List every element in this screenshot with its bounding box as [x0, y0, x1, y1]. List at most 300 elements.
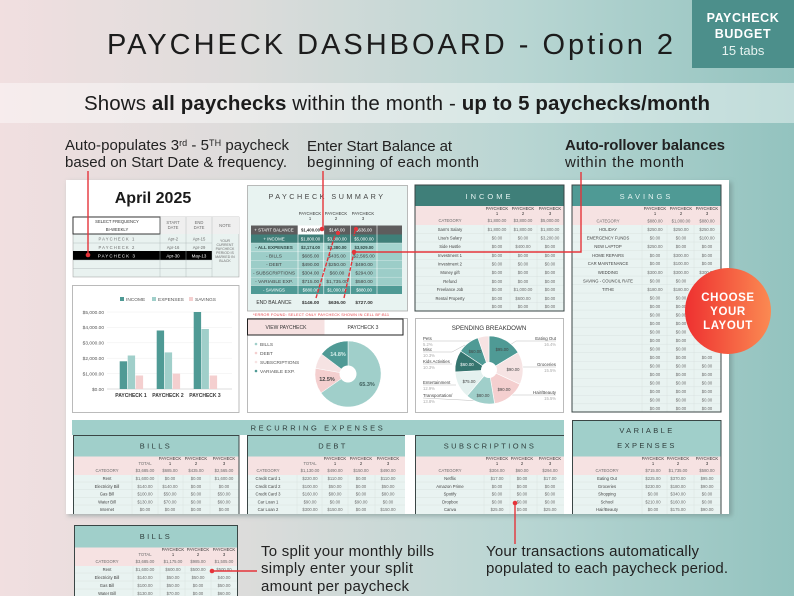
table: debt: PAYCHECK [350, 456, 372, 461]
annotation: auto-populates: TH [209, 138, 221, 148]
table: subscriptions: $0.00 [545, 484, 556, 489]
table: income [415, 185, 564, 311]
panel: paycheck summary: $880.00 [303, 288, 319, 292]
panel: spending breakdown: 15.5% [544, 368, 556, 373]
callout table: bills split: $500.00 [216, 567, 232, 572]
annotation: auto-populates: paycheck [221, 137, 290, 154]
panel: paycheck selector table: START [166, 220, 180, 225]
pie chart: 65.3% [359, 382, 375, 388]
table: savings: $250.00 [673, 227, 689, 232]
table: subscriptions: Netflix [444, 476, 457, 481]
table: variable expenses: $90.00 [701, 484, 714, 489]
table: income: Rental Property [435, 296, 465, 301]
panel: paycheck summary: - SUBSCRIPTIONS [253, 271, 295, 277]
panel: paycheck selector table: Apr-30 [166, 254, 180, 258]
panel: paycheck summary: 1 [309, 216, 312, 221]
table: savings: $0.00 [650, 253, 661, 258]
table: savings: $0.00 [676, 398, 687, 402]
table: debt: $110.00 [328, 476, 343, 481]
table: bills: PAYCHECK [159, 456, 181, 461]
callout table: bills split: $1,505.00 [215, 559, 234, 564]
arrow: start balance pointer [320, 171, 324, 231]
table: income: $1,800.00 [541, 227, 560, 232]
table: subscriptions: Amazon Prime [436, 484, 464, 489]
table: debt: $80.00 [382, 492, 395, 496]
table: bills: CATEGORY [95, 468, 119, 473]
table: savings: $100.00 [699, 236, 715, 240]
callout table: bills split: $60.00 [218, 591, 231, 596]
table: variable expenses: 1 [652, 461, 655, 466]
panel: paycheck selector table: Apr-2 [168, 236, 179, 242]
panel: spending breakdown: 5.2% [423, 342, 433, 347]
table: debt: $0.00 [330, 500, 341, 504]
callout table: bills split: PAYCHECK [213, 547, 235, 552]
table: income: $0.00 [492, 296, 503, 301]
panel: paycheck selector table: Apr-15 [193, 236, 206, 242]
annotation: auto-rollover balances: within the month [564, 154, 684, 171]
panel: spending breakdown: $95.00 [496, 347, 509, 352]
panel: paycheck selector table: Apr-29 [193, 245, 206, 250]
table: savings: $0.00 [650, 364, 661, 368]
table: savings: $0.00 [676, 244, 687, 249]
table: income: 2 [522, 211, 525, 216]
panel: paycheck selector table: DATE [168, 225, 179, 230]
panel: bar chart: $1,000.00 [83, 372, 104, 378]
panel: paycheck summary: END BALANCE [256, 300, 292, 306]
table: savings: $0.00 [650, 355, 661, 360]
table: savings: PAYCHECK [670, 206, 692, 211]
callout table: bills split: $100.00 [137, 583, 153, 588]
table: savings: $300.00 [647, 270, 663, 275]
table: income: CATEGORY [438, 218, 462, 223]
table: savings: $0.00 [676, 312, 687, 318]
table: income: INCOME [466, 192, 514, 201]
annotation: auto-rollover balances: Auto-rollover balances [565, 137, 725, 154]
panel: spending breakdown: Pets [423, 336, 433, 341]
table: savings: $0.00 [650, 296, 661, 300]
panel: paycheck summary: - SAVINGS [263, 288, 285, 292]
annotation: split monthly bills: simply enter your split [261, 560, 414, 577]
table: savings: $1,000.00 [672, 218, 691, 224]
table: subscriptions: $0.00 [517, 507, 528, 512]
table: income: $0.00 [492, 287, 503, 292]
panel: bar chart: PAYCHECK 1 [115, 393, 147, 399]
table: debt: 3 [387, 461, 390, 466]
annotation: auto-rollover balances [564, 137, 725, 171]
table: income: 1 [496, 211, 499, 216]
callout table: bills split: $40.00 [218, 575, 231, 580]
table: savings: CAR MAINTENANCE [588, 261, 628, 266]
badge: paycheck budget 15 tabs: 15 tabs [722, 43, 765, 58]
panel: paycheck summary: - DEBT [266, 262, 282, 268]
table: income: Sam's Salary [438, 227, 463, 232]
panel: paycheck summary [248, 186, 408, 311]
table: bills: $0.00 [219, 484, 230, 489]
table: bills: $3,685.00 [136, 468, 155, 473]
table: bills: $1,600.00 [136, 476, 155, 481]
table: income: $0.00 [545, 244, 556, 249]
panel: spending breakdown: 10.3% [423, 365, 435, 370]
table: income: $0.00 [492, 279, 503, 284]
table: bills: BILLS [140, 442, 172, 450]
table: debt: $0.00 [383, 500, 394, 504]
table: variable expenses: PAYCHECK [642, 456, 664, 461]
bars: paycheck 3 [194, 312, 217, 389]
table: income: $0.00 [545, 287, 556, 292]
panel: paycheck summary: - VARIABLE EXP. [255, 279, 293, 285]
table: subscriptions: $17.00 [544, 476, 557, 481]
annotation: auto-populates: Auto-populates 3 [65, 137, 179, 154]
panel: spending breakdown: Eating Out [535, 336, 557, 341]
table: debt: $110.00 [381, 476, 396, 481]
table: subscriptions: $0.00 [492, 484, 503, 489]
table: savings: $250.00 [647, 227, 663, 232]
table: bills [73, 435, 239, 514]
panel: bar chart: $3,000.00 [83, 340, 104, 346]
panel: paycheck summary: $2,174.00 [301, 245, 321, 250]
panel: spending breakdown: Misc [423, 347, 433, 352]
panel: paycheck summary: $1,400.00 [301, 228, 321, 233]
table: variable expenses: $230.00 [645, 484, 661, 489]
table: debt: PAYCHECK [324, 456, 346, 461]
table: variable expenses: Groceries [598, 484, 616, 489]
table: subscriptions: PAYCHECK [539, 456, 561, 461]
panel: paycheck summary: $304.00 [302, 271, 319, 277]
callout table: bills split: $50.00 [192, 575, 205, 580]
panel: spending breakdown: 10.3% [423, 353, 435, 358]
panel: bar chart: $0.00 [92, 387, 104, 393]
table: income: $0.00 [518, 270, 529, 275]
table: subscriptions: $25.00 [491, 507, 504, 512]
table: income: $1,800.00 [514, 227, 533, 232]
table: income: Side Hustle [439, 244, 461, 249]
table: bills: PAYCHECK [213, 456, 235, 461]
badge: paycheck budget 15 tabs: PAYCHECK [707, 11, 779, 25]
table: subscriptions: 3 [549, 461, 552, 466]
table: savings: HOLIDAY [599, 227, 617, 232]
table: income: $0.00 [492, 270, 503, 275]
table: savings: $0.00 [676, 406, 687, 411]
table: income: Investment 2 [438, 262, 463, 266]
table: income: $0.00 [492, 262, 503, 266]
table: debt: $0.00 [356, 492, 367, 496]
panel: spending breakdown: 12.9% [423, 386, 435, 391]
table: bills: $2,565.00 [215, 468, 234, 473]
table: savings: $0.00 [650, 338, 661, 343]
panel: paycheck summary: $250.00 [328, 262, 346, 268]
table: bills: $0.00 [165, 476, 176, 481]
panel: paycheck selector table: DATE [194, 225, 205, 230]
table: savings: $0.00 [650, 372, 661, 377]
table: subscriptions: Canva [444, 507, 457, 512]
error note: *ERROR FOUND: SELECT ONLY PAYCHECK SHOWN IN CELL BF:B11 [253, 312, 389, 317]
table: savings: $880.00 [699, 218, 715, 224]
table: variable expenses: $715.00 [645, 468, 661, 473]
legend [120, 297, 216, 303]
table: savings: $0.00 [650, 312, 661, 318]
table: variable expenses: $0.00 [648, 492, 659, 496]
table: subscriptions: SUBSCRIPTIONS [444, 442, 536, 450]
donut chart [455, 336, 523, 404]
table: savings: $0.00 [702, 389, 713, 394]
table: debt: TOTAL [303, 461, 317, 466]
table: variable expenses: $95.00 [701, 476, 714, 481]
panel: paycheck selector table: May-13 [192, 254, 207, 258]
bars: paycheck 1 [120, 356, 143, 389]
table: savings: WEDDING [598, 270, 618, 275]
table: savings: $0.00 [702, 364, 713, 368]
table: debt: $220.00 [302, 476, 318, 481]
table: savings: $0.00 [702, 253, 713, 258]
panel: paycheck selector table: YOUR [220, 239, 231, 243]
table: subscriptions: PAYCHECK [511, 456, 533, 461]
table: debt: Car Loan 1 [258, 500, 279, 504]
annotation: transactions populated: Your transactions automatically [486, 543, 700, 560]
table: savings: $0.00 [650, 406, 661, 411]
panel: paycheck summary: $2,380.00 [327, 245, 347, 250]
panel: paycheck summary: PAYCHECK [352, 211, 374, 216]
recurring expenses band: RECURRING EXPENSES [251, 424, 385, 432]
panel: spending breakdown [416, 318, 564, 412]
callout table: bills split: TOTAL [138, 552, 152, 557]
table: variable expenses: $0.00 [648, 507, 659, 512]
table: debt: $300.00 [302, 507, 318, 512]
callout table: bills split: $1,175.00 [164, 559, 183, 564]
badge: choose your layout: YOUR [710, 306, 746, 318]
pie legend: VARIABLE EXP. [260, 369, 295, 375]
table: income: $1,800.00 [488, 218, 507, 223]
annotation: enter start balance: Enter Start Balance at [307, 138, 453, 155]
table: variable expenses: Eating Out [597, 476, 618, 481]
table: savings: $0.00 [676, 346, 687, 352]
table: variable expenses: $370.00 [670, 476, 686, 481]
callout table: bills split: $0.00 [193, 591, 204, 596]
table: variable expenses: VARIABLE [619, 426, 675, 435]
table: income: $0.00 [545, 262, 556, 266]
callout table: bills split: PAYCHECK [162, 547, 184, 552]
badge: choose your layout [685, 268, 771, 354]
table: savings: $0.00 [676, 236, 687, 240]
annotation: transactions populated: populated to each paycheck period. [486, 560, 728, 577]
panel: paycheck selector table: BLACK [219, 259, 231, 263]
table: bills: $0.00 [191, 476, 202, 481]
table: debt: $80.00 [329, 492, 342, 496]
arrow: auto-rollover pointer [352, 172, 581, 254]
table: bills: Rent [103, 476, 112, 481]
panel: paycheck selector table: SELECT FREQUENCY [95, 219, 139, 224]
table: income: $1,800.00 [488, 227, 507, 232]
table: savings: $880.00 [647, 218, 663, 224]
table: debt: $100.00 [302, 484, 318, 489]
table: bills: $60.00 [218, 500, 231, 504]
table: debt: $50.00 [382, 484, 395, 489]
table: bills: $0.00 [165, 507, 176, 512]
table: subscriptions: 2 [521, 461, 524, 466]
arrow: transactions pointer [513, 501, 517, 544]
table: debt: Credit Card 3 [256, 492, 281, 496]
table: savings: SAVING - COUNCIL RATE [583, 278, 633, 284]
table: bills: $50.00 [218, 492, 231, 496]
callout table: bills split: $50.00 [167, 575, 180, 580]
panel: bar chart: $5,000.00 [83, 310, 104, 316]
table: bills: $0.00 [140, 507, 151, 512]
table: variable expenses: $180.00 [670, 484, 686, 489]
panel: paycheck selector table: END [195, 220, 203, 225]
table: income: $0.00 [518, 236, 529, 240]
table: subscriptions: $25.00 [544, 507, 557, 512]
table: savings: $0.00 [702, 244, 713, 249]
table: variable expenses: $210.00 [645, 500, 661, 504]
panel: paycheck summary: $435.00 [328, 254, 346, 260]
panel: paycheck summary: 2 [335, 216, 338, 221]
table: subscriptions [415, 435, 564, 514]
table: bills: $0.00 [191, 500, 202, 504]
leader lines [423, 338, 556, 401]
badge: choose your layout: LAYOUT [703, 320, 753, 332]
table: savings: $300.00 [673, 253, 689, 258]
panel: paycheck selector table: Apr-16 [167, 245, 180, 250]
table: bills: $1,600.00 [215, 476, 234, 481]
pie legend: DEBT [260, 351, 273, 357]
table: subscriptions: $0.00 [492, 500, 503, 504]
panel: paycheck summary: PAYCHECK [299, 211, 321, 216]
panel: paycheck summary: $580.00 [355, 279, 373, 285]
panel: paycheck summary: $490.00 [355, 262, 373, 268]
panel: bar chart: PAYCHECK 2 [152, 393, 184, 399]
table: variable expenses: $340.00 [670, 492, 686, 496]
table: income: 3 [549, 211, 552, 216]
panel: paycheck summary: + START BALANCE [254, 228, 294, 233]
table: variable expenses [572, 420, 721, 514]
panel: paycheck summary: $1,735.00 [326, 279, 348, 285]
table: debt: $1,130.00 [301, 468, 320, 473]
table: savings: NEW LAPTOP [594, 244, 622, 249]
table: savings: $0.00 [650, 236, 661, 240]
table: debt [247, 435, 405, 514]
table: income: PAYCHECK [486, 206, 508, 211]
pie chart: 12.5% [319, 377, 335, 383]
table: savings: $0.00 [676, 364, 687, 368]
table: savings: $0.00 [676, 296, 687, 300]
table: savings: $0.00 [676, 389, 687, 394]
panel: paycheck summary: $490.00 [302, 262, 319, 268]
table: income: PAYCHECK [539, 206, 561, 211]
table: subscriptions: $0.00 [545, 500, 556, 504]
table: income: $0.00 [545, 304, 556, 309]
annotation: auto-populates: based on Start Date & frequency. [65, 154, 287, 171]
table: income: Lisa's Salary [438, 236, 463, 240]
table: variable expenses: Shopping [598, 492, 617, 496]
panel: spending breakdown: Transportation/ [423, 393, 453, 398]
panel: paycheck summary: $715.00 [302, 279, 319, 285]
table: debt: $490.00 [380, 468, 396, 473]
table: savings: $300.00 [699, 270, 715, 275]
panel: bar chart: $4,000.00 [83, 325, 104, 331]
table: savings: $180.00 [673, 287, 689, 292]
panel: paycheck selector table [73, 217, 239, 277]
callout table: bills split: $1,600.00 [136, 567, 155, 572]
panel: paycheck summary: $1,800.00 [301, 236, 321, 242]
table: variable expenses: PAYCHECK [667, 456, 689, 461]
table: variable expenses: CATEGORY [595, 468, 619, 473]
table: savings: $0.00 [676, 355, 687, 360]
table: savings: $0.00 [650, 321, 661, 326]
pie legend: BILLS [260, 342, 273, 348]
recurring expenses band [72, 420, 564, 435]
table: income: $0.00 [492, 236, 503, 240]
callout table: bills split: 1 [172, 552, 175, 557]
panel: bar chart [72, 286, 239, 412]
callout table: bills split: 2 [197, 552, 200, 557]
panel: spending breakdown: 15.5% [544, 396, 556, 401]
table: savings: SAVINGS [620, 192, 673, 201]
table: debt: $150.00 [353, 468, 369, 473]
table: subscriptions: $0.00 [517, 484, 528, 489]
panel: paycheck summary: - ALL EXPENSES [255, 245, 293, 250]
panel: paycheck selector table: PERIOD IS [216, 251, 235, 255]
table: bills: $140.00 [162, 484, 178, 489]
arrow: auto-populates pointer [86, 171, 90, 257]
pie legend [255, 342, 299, 375]
table: bills: 3 [223, 461, 226, 466]
callout table: bills split: Electricity Bill [95, 575, 119, 580]
panel: spending breakdown: Groceries [537, 362, 557, 367]
table: subscriptions: $60.00 [516, 468, 529, 473]
panel: spending breakdown: 13.8% [423, 399, 435, 404]
table: savings: EMERGENCY FUNDS [587, 236, 629, 240]
table: income: $0.00 [518, 262, 529, 266]
table: subscriptions: CATEGORY [438, 468, 462, 473]
table: bills: 2 [195, 461, 198, 466]
table: savings: $0.00 [702, 355, 713, 360]
table: bills: Internet [100, 507, 115, 512]
table: bills: Water Bill [98, 500, 116, 504]
table: subscriptions: 1 [496, 461, 499, 466]
annotation: transactions populated [486, 543, 728, 577]
table: debt: 1 [334, 461, 337, 466]
table: income: $3,200.00 [541, 236, 560, 240]
callout table: bills split: $0.00 [193, 583, 204, 588]
callout table: bills split: $50.00 [167, 583, 180, 588]
table: debt: $150.00 [380, 507, 396, 512]
table: savings: $0.00 [676, 330, 687, 334]
panel: paycheck summary: $146.00 [329, 228, 345, 233]
table: variable expenses: $580.00 [699, 468, 715, 473]
table: debt: PAYCHECK [377, 456, 399, 461]
table: bills: Electricity Bill [95, 484, 119, 489]
table: savings: $0.00 [702, 372, 713, 377]
panel: spending breakdown: $80.00 [477, 393, 490, 398]
table: bills: $130.00 [137, 500, 153, 504]
panel: paycheck selector table: BI-WEEKLY [106, 227, 128, 232]
table: income: $0.00 [545, 270, 556, 275]
table: savings: $0.00 [702, 398, 713, 402]
panel: spending breakdown: Entertainment [423, 380, 451, 385]
bars: paycheck 2 [157, 330, 180, 389]
table: bills: $140.00 [137, 484, 153, 489]
panel: view paycheck pie: PAYCHECK 3 [348, 325, 379, 331]
table: variable expenses: Hair/Beauty [596, 507, 619, 512]
table: savings: $250.00 [699, 227, 715, 232]
table: savings: PAYCHECK [644, 206, 666, 211]
table: savings: $0.00 [650, 304, 661, 309]
panel: spending breakdown: Hair/Beauty [533, 390, 557, 395]
panel: paycheck selector table: PAYCHECK 1 [99, 236, 135, 242]
table: savings: $0.00 [702, 406, 713, 411]
table: income: $0.00 [492, 304, 503, 309]
table: variable expenses: $1,735.00 [669, 468, 688, 473]
callout table: bills split: $985.00 [190, 559, 206, 564]
